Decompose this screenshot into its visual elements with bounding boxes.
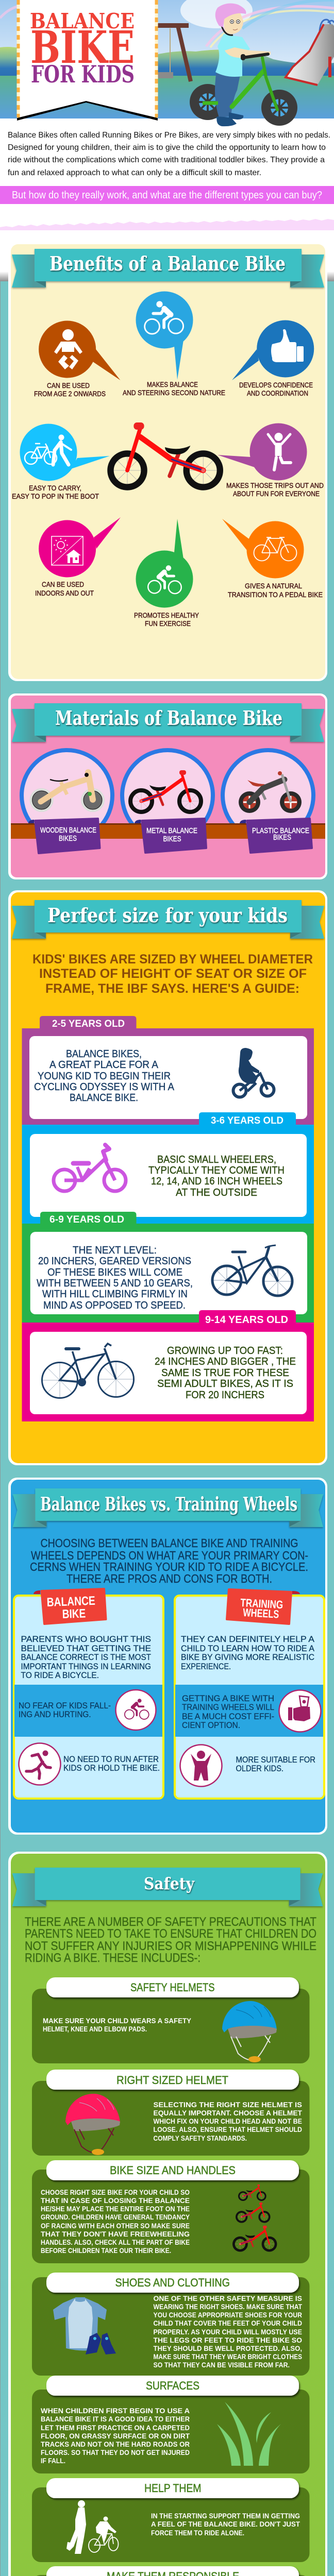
text — [154, 2100, 302, 2142]
text: THAT THEY DON'T HAVE FREEWHEELING — [41, 2230, 190, 2238]
tag: training wheels — [227, 1589, 291, 1624]
pro text: NO FEAR OF KIDS FALL- — [19, 1701, 111, 1710]
text: SAME IS TRUE FOR THESE — [161, 1367, 289, 1379]
text: FORCE THEM TO RIDE ALONE. — [151, 2529, 244, 2537]
panel: benefits of a balance bike — [8, 242, 327, 681]
label: FROM AGE 2 ONWARDS — [34, 389, 106, 398]
wooden shelf — [11, 823, 325, 839]
card: help them: HELP THEM — [144, 2482, 201, 2495]
white title banner — [17, 0, 158, 121]
pro text — [21, 1634, 151, 1680]
text — [37, 1245, 193, 1311]
bubble: healthy exercise — [134, 519, 199, 628]
card: training wheels — [175, 1589, 324, 1799]
text: GROWING UP TOO FAST: — [167, 1345, 283, 1357]
age block: 3-6 years — [22, 1112, 314, 1224]
age block: 9-14 years: 9-14 YEARS OLD — [205, 1314, 288, 1326]
text: THE LEGS OR FEET TO RIDE THE BIKE SO — [154, 2336, 302, 2344]
text: BALANCE BIKE IT IS A GOOD IDEA TO EITHER — [41, 2415, 190, 2423]
intro text — [30, 1536, 308, 1585]
con text: EXPERIENCE. — [181, 1662, 231, 1671]
label: AND COORDINATION — [247, 389, 308, 397]
label — [134, 611, 199, 628]
label tag: metal: BIKES — [163, 835, 181, 843]
icon circle: money in hand — [279, 1690, 321, 1732]
label tag: wooden: BIKES — [59, 834, 77, 843]
label: DEVELOPS CONFIDENCE — [239, 381, 313, 389]
label: PROMOTES HEALTHY — [134, 611, 199, 619]
text: WITH BETWEEN 5 AND 10 GEARS, — [37, 1278, 193, 1289]
icon: bike and walker — [25, 435, 71, 465]
label tag: plastic: PLASTIC BALANCE — [252, 826, 309, 835]
intro paragraph: fun and relaxed approach to what can only be a difficult skill to master. — [8, 168, 261, 177]
age block: 6-9 years: 6-9 YEARS OLD — [49, 1214, 124, 1225]
icon: sun and house — [52, 536, 83, 565]
ribbon heading: safety — [12, 1868, 323, 1906]
text: BALANCE BIKE. — [70, 1092, 138, 1104]
text: BEFORE CHILDREN TAKE OUR THEIR BIKE. — [41, 2246, 171, 2255]
illustration: child on green balance bike — [190, 4, 297, 126]
intro text: FRAME, THE IBF SAYS. HERE'S A GUIDE: — [45, 981, 299, 996]
illustration: metal bike — [130, 770, 201, 812]
label — [239, 381, 313, 397]
ribbon heading: benefits: Benefits of a Balance Bike — [49, 252, 286, 275]
illustration: three bike sizes — [233, 2184, 276, 2250]
ribbon heading: materials: Materials of Balance Bike — [55, 706, 282, 730]
icon: jumping person — [268, 433, 291, 470]
text: A FEEL OF THE BALANCE BIKE. DON'T JUST — [151, 2520, 300, 2528]
pro text: KIDS OR HOLD THE BIKE. — [63, 1763, 160, 1773]
con text: CHILD TO LEARN HOW TO RIDE A — [181, 1643, 315, 1653]
pro text: BALANCE CORRECT IS THE MOST — [21, 1652, 151, 1662]
pro text: NO NEED TO RUN AFTER — [63, 1754, 159, 1764]
text: A GREAT PLACE FOR A — [49, 1059, 159, 1071]
icon: cyclist — [145, 301, 183, 334]
tag: balance bike: BIKE — [62, 1606, 86, 1621]
card: help them — [32, 2478, 309, 2562]
label tag: wooden: WOODEN BALANCE — [40, 826, 96, 835]
icon: baby — [54, 329, 82, 369]
text — [154, 2294, 302, 2369]
con text: MORE SUITABLE FOR — [236, 1755, 315, 1765]
title: BIKE — [30, 22, 135, 74]
tag: training wheels: WHEELS — [243, 1606, 279, 1621]
text — [148, 1154, 285, 1198]
text: TRACKS AND NOT ON THE HARD ROADS OR — [41, 2440, 190, 2448]
icon: road bike — [254, 537, 297, 561]
card: safety helmets: SAFETY HELMETS — [130, 1981, 214, 1994]
bubble: fun for everyone — [218, 423, 324, 498]
tag: balance bike — [41, 1589, 106, 1624]
intro text: INSTEAD OF HEIGHT OF SEAT OR SIZE OF — [39, 967, 307, 981]
text: CHILD THAT COVER THE FEET OF YOUR CHILD — [154, 2319, 302, 2327]
pro text: TO RIDE A BICYCLE. — [21, 1670, 99, 1680]
panel: perfect size — [8, 890, 327, 1465]
con text: BIKE BY GIVING MORE REALISTIC — [181, 1652, 314, 1662]
pro text — [19, 1701, 111, 1719]
con text: OLDER KIDS. — [236, 1764, 283, 1773]
pro text: ING AND HURTING. — [19, 1709, 91, 1719]
metal bike window — [122, 750, 213, 841]
card: shoes and clothing: SHOES AND CLOTHING — [115, 2276, 230, 2289]
title: BALANCE — [30, 9, 135, 33]
label: EASY TO CARRY, — [29, 484, 81, 492]
panel: balance bikes vs training wheels — [8, 1478, 327, 1835]
card: shoes and clothing — [32, 2273, 309, 2376]
bubble: balance and steering — [123, 292, 225, 397]
text: EQUALLY IMPORTANT. CHOOSE A HELMET — [154, 2109, 302, 2117]
icon: child on balance bike silhouette — [233, 1048, 274, 1097]
text — [41, 2188, 190, 2255]
ribbon heading: perfect size: Perfect size for your kids — [47, 904, 288, 927]
intro paragraph: ride without the complications which come with traditional toddler bikes. They provide a — [8, 156, 325, 164]
text: HANDLES. ALSO, CHECK ALL THE PART OF BIKE — [41, 2238, 190, 2246]
label — [123, 380, 225, 397]
label: TRANSITION TO A PEDAL BIKE — [228, 590, 323, 599]
illustration: wooden bike — [30, 772, 105, 812]
question bar — [0, 186, 334, 204]
sky and playground scenery — [0, 0, 334, 118]
text: 12, 14, AND 16 INCH WHEELS — [151, 1176, 282, 1187]
label: ABOUT FUN FOR EVERYONE — [233, 489, 320, 498]
card: make them responsible — [32, 2566, 309, 2576]
intro text: RIDING A BIKE. THESE INCLUDES-: — [25, 1951, 201, 1965]
label: CAN BE USED — [47, 381, 90, 389]
illustration: red balance bike — [110, 422, 220, 487]
pro text: IMPORTANT THINGS IN LEARNING — [21, 1662, 151, 1671]
text — [34, 1048, 175, 1104]
age block: 6-9 years — [22, 1212, 314, 1323]
label — [12, 484, 99, 500]
illustration: plastic bike — [239, 771, 302, 813]
icon: adult walking beside cyclist — [66, 2500, 119, 2554]
text: HE/SHE MAY PLACE THE ENTIRE FOOT ON THE — [41, 2205, 190, 2213]
text: LET THEM FIRST PRACTICE ON A CARPETED — [41, 2424, 190, 2432]
card: bike size and handles — [32, 2160, 309, 2263]
card: right sized helmet: RIGHT SIZED HELMET — [116, 2074, 228, 2087]
text: WHEN CHILDREN FIRST BEGIN TO USE A — [41, 2406, 190, 2415]
label — [228, 582, 323, 599]
icon circle: runner — [19, 1743, 61, 1785]
text: MAKE SURE YOUR CHILD WEARS A SAFETY — [43, 2016, 192, 2025]
label: CAN BE USED — [42, 580, 84, 588]
text: OF RACING WITH EACH OTHER SO MAKE SURE — [41, 2222, 190, 2230]
con text: GETTING A BIKE WITH — [182, 1693, 274, 1703]
text: CHOOSE RIGHT SIZE BIKE FOR YOUR CHILD SO — [41, 2188, 190, 2196]
text: SO THAT THEY CAN BE VISIBLE FROM FAR. — [154, 2361, 290, 2369]
title: FOR KIDS — [31, 60, 135, 88]
bubble: can be used from age 2 — [34, 320, 121, 398]
text: OF THESE BIKES WILL COME — [47, 1267, 182, 1278]
age block: 9-14 years — [22, 1310, 314, 1421]
text: BALANCE BIKES, — [66, 1048, 142, 1060]
intro paragraph: Designed for young children, their aim is to give the child the opportunity to learn how to — [8, 143, 326, 152]
text: THAT IN CASE OF LOOSING THE BALANCE — [41, 2196, 190, 2205]
ribbon heading: versus — [13, 1488, 323, 1527]
label tag: metal — [135, 819, 206, 853]
text: FLOORS. SO THAT THEY DO NOT GET INJURED — [41, 2448, 190, 2456]
text — [151, 2512, 300, 2537]
age block: 2-5 years: 2-5 YEARS OLD — [52, 1019, 125, 1029]
label: EASY TO POP IN THE BOOT — [12, 492, 99, 500]
label tag: wooden — [28, 819, 100, 853]
text: COMPLY SAFETY STANDARDS. — [154, 2134, 247, 2142]
card: surfaces: SURFACES — [146, 2379, 199, 2392]
card: safety helmets — [32, 1977, 309, 2063]
pro text: PARENTS WHO BOUGHT THIS — [21, 1634, 151, 1644]
text: MAKE SURE THAT THEY WEAR BRIGHT CLOTHES — [154, 2352, 302, 2361]
title — [30, 9, 135, 88]
icon: pink bike silhouette — [54, 1145, 126, 1191]
label: AND STEERING SECOND NATURE — [123, 388, 225, 397]
icon circle: child with raised arms — [180, 1744, 222, 1787]
ribbon heading: materials — [12, 703, 324, 742]
label: MAKES BALANCE — [147, 380, 198, 388]
con text: TRAINING WHEELS WILL — [182, 1702, 274, 1712]
icon: adult bike — [42, 1344, 134, 1398]
card: bike size and handles: BIKE SIZE AND HANDLES — [110, 2164, 236, 2177]
intro text: KIDS' BIKES ARE SIZED BY WHEEL DIAMETER — [32, 952, 313, 967]
text: YOU CHOOSE APPROPRIATE SHOES FOR YOUR — [154, 2311, 302, 2319]
text: THE NEXT LEVEL: — [73, 1245, 157, 1256]
text: LOOSE. ALSO, ENSURE THAT HELMET SHOULD — [154, 2125, 302, 2133]
intro paragraph — [8, 131, 330, 177]
label tag: plastic: BIKES — [273, 833, 291, 842]
ribbon heading: perfect size — [12, 900, 324, 939]
age block: 2-5 years — [22, 1016, 314, 1125]
text: WITH HILL CLIMBING FIRMLY IN — [42, 1289, 188, 1300]
panel: materials of balance bike — [8, 693, 327, 879]
hero illustration — [0, 0, 334, 126]
age block: 3-6 years: 3-6 YEARS OLD — [211, 1115, 283, 1126]
ribbon heading: benefits — [12, 249, 324, 287]
text: BASIC SMALL WHEELERS, — [157, 1154, 276, 1165]
bubble: transition to pedal bike — [222, 519, 323, 599]
panel: safety — [8, 1852, 327, 2576]
illustration: jersey and shoes — [53, 2297, 116, 2354]
text: FOR 20 INCHERS — [186, 1389, 264, 1401]
con text: THEY CAN DEFINITELY HELP A — [181, 1634, 315, 1644]
text: TYPICALLY THEY COME WITH — [148, 1165, 285, 1176]
bubble: easy to carry — [12, 423, 110, 500]
con text — [182, 1693, 274, 1730]
illustration: pink helmet — [65, 2094, 120, 2155]
card: balance bike — [14, 1589, 163, 1799]
label: INDOORS AND OUT — [35, 589, 94, 597]
text: SEMI ADULT BIKES, AS IT IS — [157, 1378, 293, 1389]
wooden bike window — [22, 750, 112, 841]
pro text: BELIEVED THAT GETTING THE — [21, 1643, 151, 1653]
label — [35, 580, 94, 597]
text: CYCLING ODYSSEY IS WITH A — [34, 1081, 175, 1093]
text: HELMET, KNEE AND ELBOW PADS. — [43, 2025, 147, 2033]
con text — [236, 1755, 315, 1773]
text: IN THE STARTING SUPPORT THEM IN GETTING — [151, 2512, 300, 2520]
tag: training wheels: TRAINING — [240, 1596, 283, 1611]
text: YOUNG KID TO BEGIN THEIR — [38, 1071, 171, 1082]
intro text: THERE ARE PROS AND CONS FOR BOTH. — [66, 1572, 272, 1585]
text: 20 INCHERS, GEARED VERSIONS — [38, 1256, 191, 1267]
text — [41, 2406, 190, 2465]
label tag: plastic — [240, 819, 312, 853]
icon circle: cyclist — [115, 1690, 156, 1730]
text: MIND AS OPPOSED TO SPEED. — [43, 1300, 186, 1311]
card: surfaces — [32, 2376, 309, 2473]
text: WHICH FIX ON YOUR CHILD HEAD AND NOT BE — [154, 2117, 302, 2125]
intro text — [32, 952, 313, 996]
icon: thumbs up — [271, 329, 304, 362]
pro text — [63, 1754, 160, 1773]
label: MAKES THOSE TRIPS OUT AND — [226, 481, 324, 489]
intro text — [25, 1915, 316, 1965]
icon: cyclist — [148, 565, 181, 594]
card: right sized helmet — [32, 2070, 309, 2156]
text: FLOOR, ON GRASSY SURFACE OR ON DIRT — [41, 2432, 190, 2440]
wavy pink strip — [0, 219, 334, 230]
label — [226, 481, 324, 498]
con text: BE A MUCH COST EFFI- — [182, 1711, 274, 1721]
bubble: indoors and out — [35, 517, 121, 597]
con text — [181, 1634, 315, 1671]
text: IF FALL. — [41, 2456, 65, 2465]
ribbon heading: safety: Safety — [144, 1874, 195, 1893]
tag: balance bike: BALANCE — [46, 1594, 95, 1609]
plastic bike window — [223, 750, 313, 841]
label — [34, 381, 106, 398]
text: AT THE OUTSIDE — [176, 1187, 257, 1198]
text: PROPERLY. AS YOUR CHILD WILL MOSTLY USE — [154, 2328, 302, 2336]
bubble: confidence — [232, 320, 314, 397]
text: GROUND. CHILDREN HAVE GENERAL TENDANCY — [41, 2213, 190, 2221]
text: WEARING THE RIGHT SHOES. MAKE SURE THAT — [154, 2302, 302, 2311]
text: THEY SHOULD BE WELL PROTECTED. ALSO, — [154, 2344, 302, 2352]
illustration: blue helmet — [222, 2001, 277, 2062]
text: SELECTING THE RIGHT SIZE HELMET IS — [154, 2100, 302, 2109]
label: FUN EXERCISE — [145, 619, 191, 628]
text — [43, 2016, 192, 2033]
icon: mountain bike — [212, 1245, 292, 1296]
icon: grass — [217, 2402, 281, 2466]
con text: CIENT OPTION. — [182, 1720, 240, 1730]
text — [155, 1345, 296, 1401]
label tag: metal: METAL BALANCE — [146, 826, 197, 835]
text: 24 INCHES AND BIGGER , THE — [155, 1356, 296, 1367]
text: ONE OF THE OTHER SAFETY MEASURE IS — [154, 2294, 302, 2302]
label: GIVES A NATURAL — [245, 582, 302, 590]
